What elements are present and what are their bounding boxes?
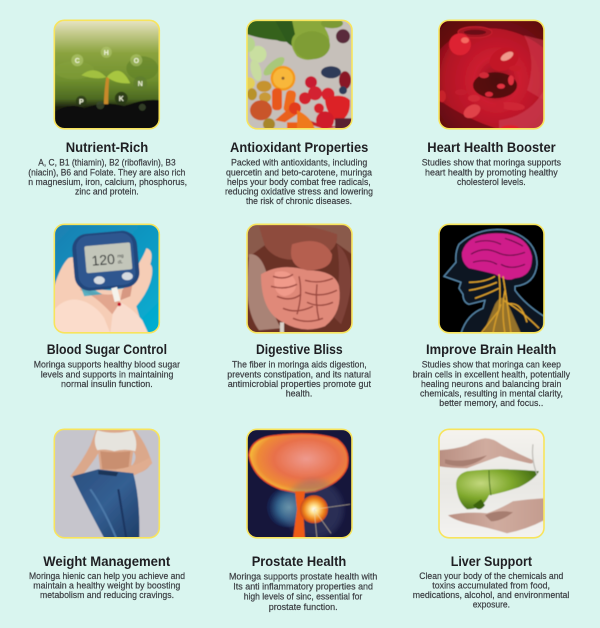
description — [28, 158, 187, 197]
image: seedling with nutrient letters: O — [134, 58, 140, 65]
heading: Antioxidant Properties — [230, 140, 369, 155]
description — [29, 571, 185, 601]
image: hand holding glucose meter — [54, 224, 159, 333]
description: brain cells in excellent health, potentially — [413, 369, 570, 380]
description — [229, 572, 377, 613]
description: exposure. — [473, 599, 510, 610]
panel: antioxidant properties — [225, 18, 373, 207]
description: cholesterol levels. — [457, 177, 526, 188]
description: health. — [286, 389, 312, 400]
heading: Improve Brain Health — [426, 342, 556, 357]
image: hand holding glucose meter: dL — [118, 259, 123, 264]
description: Moringa hienic can help you achieve and — [29, 571, 185, 582]
image: woman in oversized jeans — [54, 429, 159, 538]
description: heart health by promoting healthy — [425, 167, 558, 178]
image: seedling with nutrient letters: K — [119, 96, 124, 103]
image: hand holding glucose meter: 120 — [91, 251, 116, 269]
heading: Digestive Bliss — [256, 342, 343, 357]
panel: heart health booster — [422, 20, 561, 188]
description: helps your body combat free radicals, — [227, 177, 371, 188]
heading: Liver Support — [451, 554, 532, 569]
description: chemicals, resulting in mental clarity, — [420, 389, 563, 400]
description: Studies show that moringa supports — [422, 158, 561, 169]
description: (niacin), B6 and Folate. They are also rich — [28, 167, 185, 178]
description: Its anti inflammatory properties and — [233, 582, 373, 593]
image: hands protecting a green liver — [439, 429, 544, 538]
description: reducing oxidative stress and lowering — [225, 186, 373, 197]
description: healing neurons and balancing brain — [421, 379, 561, 390]
description: better memory, and focus.. — [439, 398, 543, 409]
description: high levels of sinc, essential for — [244, 592, 363, 603]
description: Moringa supports healthy blood sugar — [34, 360, 181, 371]
description: prostate function. — [269, 602, 338, 613]
image: seedling with nutrient letters: N — [138, 81, 143, 88]
description — [34, 360, 181, 390]
description: antimicrobial properties promote gut — [228, 379, 371, 390]
description: prevents constipation, and its natural — [227, 369, 371, 380]
description: Moringa supports prostate health with — [229, 572, 377, 583]
image: head with brain and nerves — [439, 224, 544, 333]
image: colourful fruit and vegetables — [239, 18, 352, 130]
description: levels and supports in maintaining — [41, 369, 173, 380]
panel: improve brain health — [413, 224, 570, 409]
description: Studies show that moringa can keep — [422, 360, 561, 371]
description — [422, 158, 561, 188]
heading: Blood Sugar Control — [47, 342, 167, 357]
description: The fiber in moringa aids digestion, — [232, 360, 367, 371]
image: seedling with nutrient letters: C — [75, 58, 80, 65]
panel: nutrient-rich — [28, 20, 187, 197]
description: quercetin and beto-carotene, muringa — [226, 167, 373, 178]
image: glowing prostate diagram — [247, 429, 352, 539]
image: seedling with nutrient letters: H — [104, 50, 109, 57]
heading: Heart Health Booster — [427, 140, 556, 155]
description: A, C, B1 (thiamin), B2 (riboflavin), B3 — [38, 158, 176, 169]
image: red blood cells in a vessel — [438, 20, 544, 131]
description: n magnesium, iron, calcium, phosphorus, — [28, 177, 187, 188]
panel: liver support — [413, 429, 569, 610]
panel: prostate health — [229, 429, 377, 613]
panel: weight management — [29, 429, 185, 601]
description — [225, 158, 373, 207]
heading: Nutrient-Rich — [66, 140, 148, 155]
description: normal insulin function. — [61, 379, 153, 390]
description: the risk of chronic diseases. — [246, 196, 352, 207]
description: maintain a healthy weight by boosting — [33, 581, 180, 592]
description: Clean your body of the chemicals and — [419, 571, 563, 582]
description: toxins accumulated from food, — [432, 581, 550, 592]
image: digestive organs — [247, 224, 352, 333]
description: metabolism and reducing cravings. — [40, 590, 174, 601]
heading: Prostate Health — [252, 554, 346, 569]
description — [227, 360, 371, 400]
heading: Weight Management — [43, 554, 171, 569]
panel: digestive bliss — [227, 224, 371, 400]
description — [413, 360, 570, 409]
description — [413, 571, 569, 610]
description: zinc and protein. — [75, 186, 139, 197]
description: Packed with antioxidants, including — [231, 158, 367, 169]
image: hand holding glucose meter: mg — [117, 253, 124, 259]
image: seedling with nutrient letters — [54, 20, 159, 129]
image: seedling with nutrient letters: P — [79, 99, 84, 106]
description: medications, alcohol, and environmental — [413, 590, 569, 601]
panel: blood sugar control — [34, 224, 181, 390]
